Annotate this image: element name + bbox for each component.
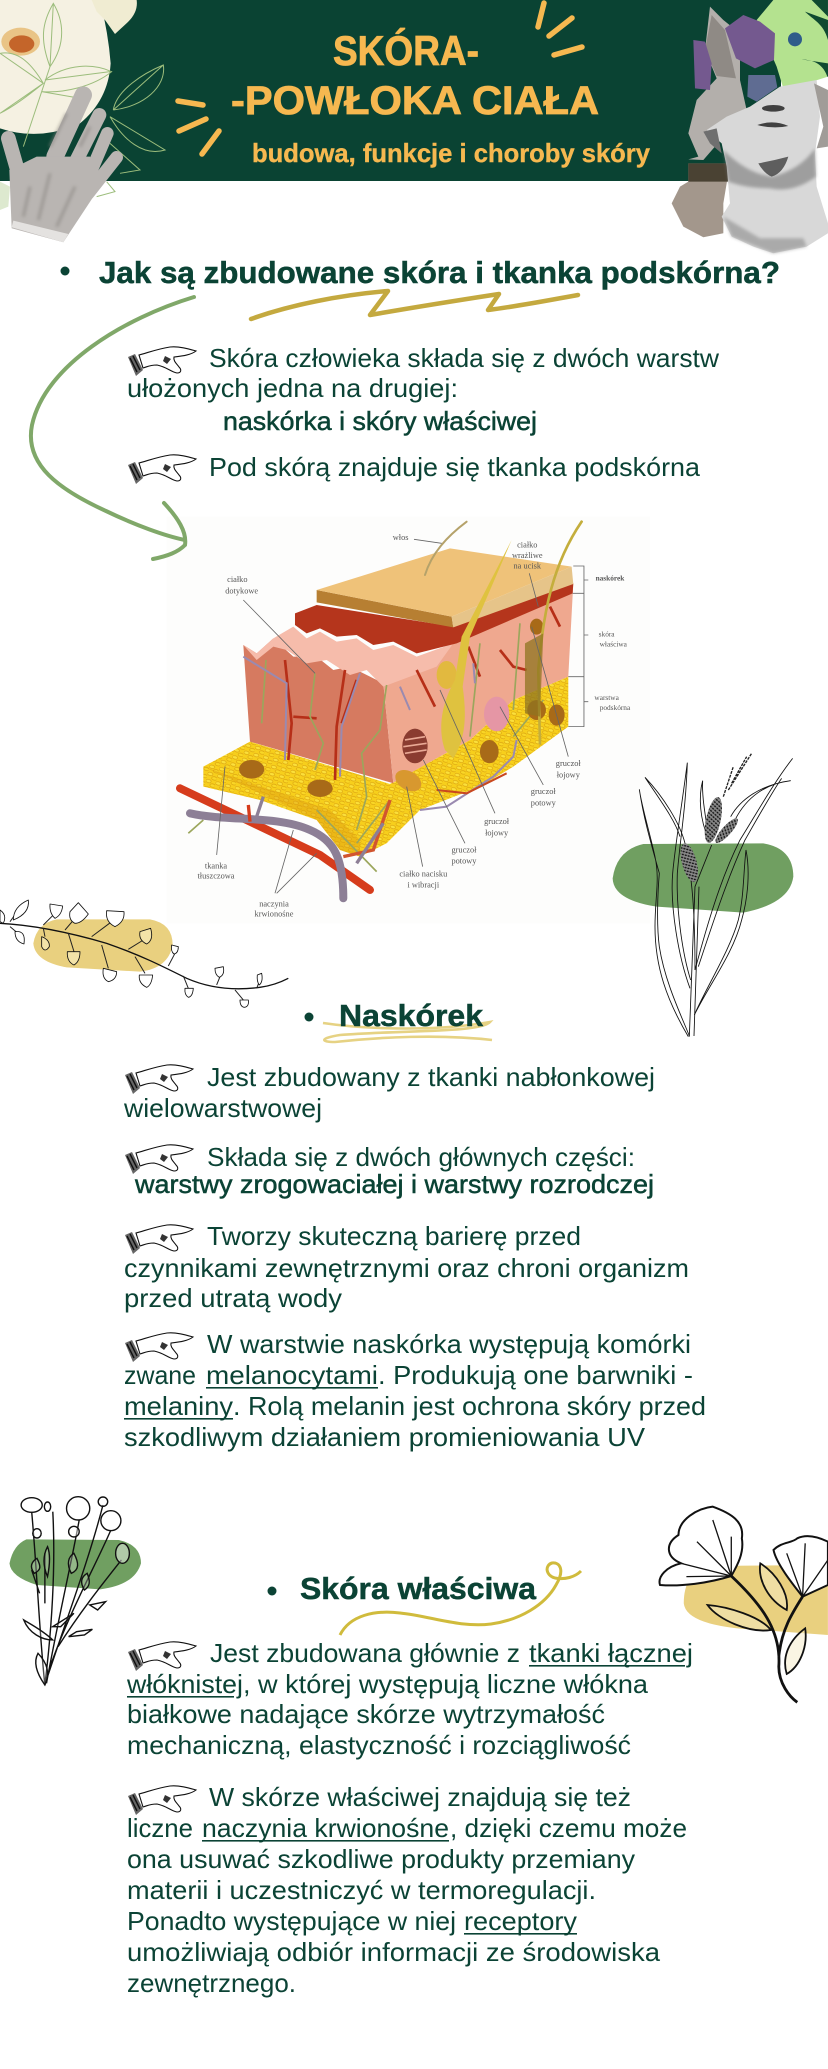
artery bbox=[180, 788, 370, 890]
header banner bbox=[0, 0, 781, 181]
sebaceous gland bbox=[437, 661, 457, 689]
flower heads and buds bbox=[21, 1497, 129, 1563]
flower right bbox=[774, 1536, 828, 1597]
paragraph: barrier: przed utratą wody bbox=[124, 1283, 342, 1313]
diagram labels: gruczoł bbox=[484, 817, 510, 826]
subtitle: budowa, funkcje i choroby skóry bbox=[252, 138, 651, 168]
statue face and neck bbox=[707, 80, 828, 253]
heading text: Skóra właściwa bbox=[300, 1571, 537, 1606]
jaw shadow bbox=[723, 148, 816, 189]
heading: Skóra właściwa bbox=[268, 1563, 581, 1635]
diagram labels: wrażliwe bbox=[512, 551, 543, 560]
face details bbox=[757, 105, 788, 177]
title line 1: SKÓRA- bbox=[333, 26, 479, 74]
dermis right face bbox=[383, 583, 573, 783]
striped gland bbox=[402, 729, 428, 763]
hair follicle bbox=[441, 540, 512, 758]
icon: pointing hand bbox=[128, 1786, 196, 1815]
title line 2: -POWŁOKA CIAŁA bbox=[231, 79, 599, 123]
icon: pointing hand bbox=[125, 1145, 193, 1174]
paragraph: two layers bbox=[127, 343, 719, 436]
bullet bbox=[304, 1012, 314, 1022]
brown wash bbox=[672, 163, 730, 237]
pressure corpuscle bbox=[392, 766, 425, 796]
paragraph: blood vessels and receptors: , dzięki czemu może bbox=[450, 1813, 687, 1843]
illustration: vine on yellow blob bbox=[0, 900, 288, 1007]
paragraph: two parts: warstwy zrogowaciałej i warstwy rozrodczej bbox=[134, 1169, 654, 1199]
leader lines bbox=[217, 539, 588, 893]
diagram backdrop bbox=[167, 517, 650, 923]
vine stem bbox=[0, 923, 288, 989]
diagram labels: gruczoł bbox=[451, 845, 477, 854]
paragraph: epidermis tissue: wielowarstwowej bbox=[123, 1093, 322, 1123]
paragraph: melanocytes: W warstwie naskórka występują komórki bbox=[207, 1329, 691, 1359]
title bbox=[231, 26, 599, 123]
vine branches bbox=[10, 910, 259, 1000]
diagram labels: tłuszczowa bbox=[197, 872, 235, 881]
paragraph: blood vessels and receptors: ona usuwać szkodliwe produkty przemiany bbox=[127, 1844, 635, 1874]
paragraph: blood vessels and receptors: W skórze właściwej znajdują się też bbox=[209, 1782, 631, 1812]
diagram labels bbox=[197, 533, 631, 919]
diagram labels: łojowy bbox=[557, 770, 581, 779]
blood vessels in dermis bbox=[285, 607, 560, 780]
epidermis front side bbox=[317, 590, 453, 627]
diagram labels: podskórna bbox=[600, 703, 631, 712]
paragraph: blood vessels and receptors: receptory bbox=[464, 1906, 577, 1936]
paragraph: blood vessels and receptors: zewnętrznego. bbox=[127, 1968, 296, 1998]
green blob bbox=[10, 1539, 141, 1589]
paragraph: melanocytes: szkodliwym działaniem promieniowania UV bbox=[124, 1422, 646, 1452]
sweat gland coil bbox=[484, 697, 509, 731]
white flower bbox=[0, 0, 111, 134]
hairs bbox=[425, 522, 582, 743]
bullet bbox=[268, 1586, 276, 1596]
squiggle underline bbox=[340, 1563, 581, 1635]
brown wash over banner bbox=[688, 163, 730, 182]
paragraph: melanocytes: melaniny bbox=[124, 1391, 233, 1421]
red basal layer bbox=[295, 583, 573, 653]
heading text: Naskórek bbox=[339, 998, 484, 1033]
diagram labels: ciałko nacisku bbox=[399, 870, 448, 879]
paragraph: subcutaneous tissue: Pod skórą znajduje się tkanka podskórna bbox=[209, 452, 701, 482]
diagram labels: łojowy bbox=[485, 828, 509, 837]
white area beside neck bbox=[800, 77, 828, 260]
diagram labels: i wibracji bbox=[407, 880, 440, 889]
paragraph: barrier: czynnikami zewnętrznymi oraz chroni organizm bbox=[124, 1253, 689, 1283]
heading text: Jak są zbudowane skóra i tkanka podskórna? bbox=[99, 255, 780, 290]
paragraph: two parts: Składa się z dwóch głównych części: bbox=[207, 1142, 635, 1172]
zigzag underline bbox=[251, 291, 578, 319]
neck shadow bbox=[723, 217, 807, 253]
icon: pointing hand bbox=[125, 1333, 193, 1362]
purple veins bbox=[243, 657, 517, 810]
icon: pointing hand bbox=[125, 1065, 193, 1094]
image: flower, leaves and plaster hand bbox=[0, 0, 165, 242]
leaf at lower left bbox=[0, 182, 10, 210]
small white flower bbox=[92, 0, 137, 34]
paragraph: epidermis tissue: Jest zbudowany z tkanki nabłonkowej bbox=[207, 1062, 655, 1092]
leaf outlines bbox=[0, 3, 165, 197]
diagram labels: tkanka bbox=[205, 862, 227, 871]
diagram labels: naczynia bbox=[259, 900, 289, 909]
illustration: wildflowers on green blob bbox=[10, 1497, 141, 1685]
diagram labels: na ucisk bbox=[514, 562, 542, 571]
light green patch bbox=[757, 0, 828, 88]
paragraph: connective tissue: białkowe nadające skórze wytrzymałość bbox=[127, 1699, 605, 1729]
small statue face bbox=[705, 15, 736, 78]
diagram labels: właściwa bbox=[600, 640, 628, 649]
diagram labels: gruczoł bbox=[531, 787, 556, 796]
fat globules bbox=[239, 619, 565, 797]
paragraph: two layers: ułożonych jedna na drugiej: bbox=[127, 373, 458, 403]
ear bbox=[703, 128, 722, 153]
nerves bbox=[188, 623, 543, 872]
green blob bbox=[613, 843, 793, 913]
dermis papillae band bbox=[243, 627, 453, 687]
paragraph: melanocytes: zwane bbox=[124, 1360, 196, 1390]
arrow: green curved bbox=[31, 297, 194, 559]
diagram labels: gruczoł bbox=[556, 759, 581, 768]
image: statue head with flowers bbox=[672, 0, 828, 260]
paragraph: two parts bbox=[125, 1142, 654, 1199]
paragraph: melanocytes: . Produkują one barwniki - bbox=[378, 1360, 693, 1390]
subcutaneous fat layer bbox=[203, 677, 568, 857]
wheat seed heads bbox=[677, 796, 741, 884]
paragraph: two layers: Skóra człowieka składa się z dwóch warstw bbox=[209, 343, 719, 373]
small statue bbox=[688, 7, 747, 160]
paragraph: barrier: Tworzy skuteczną barierę przed bbox=[207, 1221, 581, 1251]
grass leaves bbox=[639, 758, 793, 1037]
paragraph: blood vessels and receptors: naczynia krwionośne bbox=[202, 1813, 449, 1843]
epidermis right side bbox=[452, 567, 573, 627]
diagram labels: krwionośne bbox=[255, 910, 294, 919]
heading: how skin is built bbox=[60, 255, 780, 290]
paragraph: epidermis tissue bbox=[123, 1062, 655, 1123]
illustration: wheat on green blob bbox=[613, 753, 793, 1037]
heading: Naskórek bbox=[304, 998, 492, 1042]
wheat top tuft bbox=[723, 753, 752, 797]
paragraph: blood vessels and receptors: materii i uczestniczyć w termoregulacji. bbox=[127, 1875, 596, 1905]
sun rays: left bbox=[178, 101, 219, 154]
hair root dark bbox=[525, 633, 543, 717]
diagram labels: ciałko bbox=[227, 575, 248, 584]
paragraph: blood vessels and receptors bbox=[127, 1782, 687, 1998]
paragraph: connective tissue: włóknistej bbox=[126, 1669, 243, 1699]
vine flowers bbox=[0, 900, 262, 1007]
yellow blob bbox=[33, 919, 173, 972]
icon: pointing hand bbox=[125, 1225, 193, 1254]
paragraph: connective tissue: tkanki łącznej bbox=[529, 1638, 693, 1668]
stems bbox=[731, 1576, 803, 1702]
yellow blob bbox=[684, 1565, 828, 1635]
plaster hand bbox=[8, 95, 117, 242]
icon: pointing hand bbox=[128, 347, 196, 376]
icon: pointing hand bbox=[128, 455, 196, 484]
scribble underline bbox=[323, 1022, 492, 1042]
paragraph: blood vessels and receptors: liczne bbox=[127, 1813, 193, 1843]
diagram labels: skóra bbox=[599, 630, 615, 639]
diagram labels: włos bbox=[393, 533, 409, 542]
paragraph: barrier bbox=[124, 1221, 689, 1313]
paragraph: connective tissue bbox=[126, 1638, 693, 1760]
flower left veins bbox=[681, 1520, 731, 1577]
diagram labels: potowy bbox=[531, 798, 557, 807]
icon: pointing hand bbox=[128, 1642, 196, 1671]
flower centre bbox=[1, 28, 40, 56]
paragraph: blood vessels and receptors: Ponadto występujące w niej bbox=[127, 1906, 456, 1936]
purple flower bbox=[693, 15, 777, 102]
leaves bbox=[708, 1563, 806, 1674]
paragraph: blood vessels and receptors: umożliwiają odbiór informacji ze środowiska bbox=[127, 1937, 661, 1967]
paragraph: melanocytes bbox=[124, 1329, 706, 1452]
diagram labels: potowy bbox=[451, 857, 477, 866]
bullet bbox=[60, 266, 70, 276]
dermis front face bbox=[243, 638, 393, 783]
hair bbox=[814, 83, 828, 148]
vessel branches bbox=[248, 773, 507, 863]
diagram labels: warstwa bbox=[594, 693, 620, 702]
diagram: skin cross-section bbox=[167, 517, 650, 923]
flower right veins bbox=[787, 1543, 828, 1597]
fat left side shade bbox=[203, 767, 360, 857]
illustration: line-art flowers on yellow blob bbox=[660, 1507, 828, 1702]
paragraph: connective tissue: , w której występują liczne włókna bbox=[243, 1669, 649, 1699]
blue flower bbox=[788, 32, 802, 46]
diagram labels: ciałko bbox=[517, 540, 537, 549]
vein bbox=[190, 813, 343, 898]
flower left bbox=[660, 1507, 742, 1585]
stems bbox=[32, 1505, 121, 1685]
paragraph: melanocytes: melanocytami bbox=[206, 1360, 378, 1390]
paragraph: connective tissue: Jest zbudowana głównie z bbox=[210, 1638, 520, 1668]
diagram labels: dotykowe bbox=[225, 586, 258, 595]
paragraph: two layers: naskórka i skóry właściwej bbox=[223, 406, 537, 436]
sun rays: right bbox=[538, 3, 582, 55]
dark leaves bbox=[802, 0, 828, 78]
diagram labels: naskórek bbox=[596, 574, 625, 583]
paragraph: connective tissue: mechaniczną, elastyczność i rozciągliwość bbox=[127, 1730, 631, 1760]
leaves bbox=[24, 1547, 106, 1685]
epidermis top bbox=[317, 548, 572, 617]
paragraph: melanocytes: . Rolą melanin jest ochrona skóry przed bbox=[233, 1391, 706, 1421]
